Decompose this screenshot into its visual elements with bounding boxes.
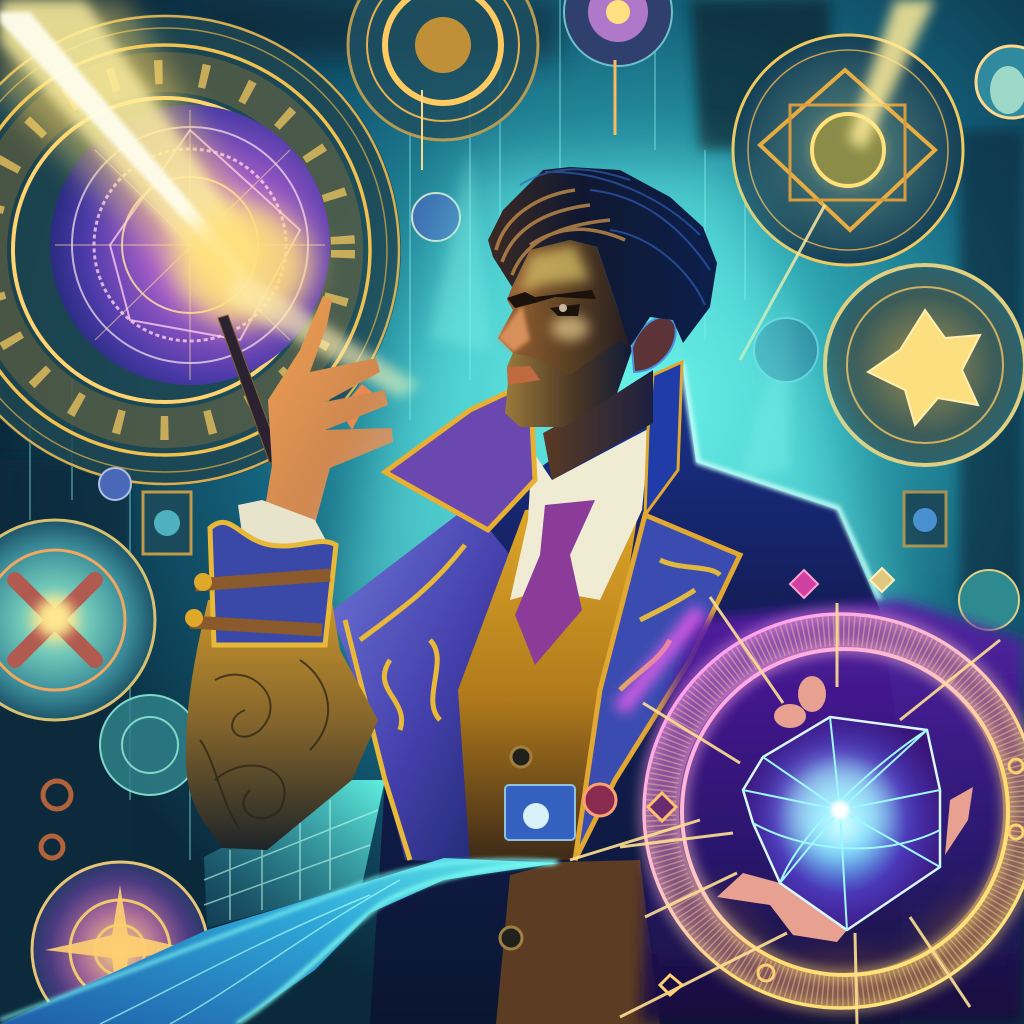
shirt: white collar and front — [510, 428, 650, 600]
coat: gold embroidery — [345, 545, 465, 860]
coat cuff — [210, 522, 336, 645]
figure: sorcerer — [186, 167, 905, 1024]
hair: blue strands — [520, 169, 710, 305]
light beam to the wand tip — [0, 0, 420, 398]
cuff straps — [190, 575, 330, 630]
warm glow in lower interior — [700, 880, 990, 972]
arcane orb: top right edge — [976, 46, 1024, 118]
arcane circle: bottom left star — [32, 862, 208, 1024]
ear — [632, 317, 676, 372]
brooch — [523, 803, 549, 829]
vest button — [511, 747, 531, 767]
magic circle: lower right pink and gold — [570, 568, 1024, 1024]
coat: dark blue body — [370, 362, 905, 1024]
collar: right blue — [645, 362, 682, 515]
small blue circles — [99, 193, 1019, 630]
mouth — [507, 366, 540, 385]
sleeve: swirl lines — [200, 660, 328, 830]
arcane circle: large purple circle upper left — [0, 14, 401, 486]
neck — [543, 370, 653, 480]
rays — [570, 597, 1000, 1024]
aura behind the figure — [330, 170, 900, 640]
eye white — [559, 304, 567, 312]
coat: purple patterned front — [330, 505, 510, 862]
collar: left purple — [385, 382, 535, 530]
face — [498, 240, 632, 427]
forehead highlight — [518, 245, 590, 295]
vest: gold waistcoat — [458, 500, 640, 860]
beard — [505, 340, 632, 427]
sigil: left diamond — [648, 793, 676, 821]
magic glow along lapel — [620, 610, 700, 710]
lapel: gold embroidery — [620, 560, 720, 690]
dark purple field behind magic circle — [640, 600, 1024, 1024]
hair: gold strands — [496, 190, 625, 275]
palm and fingers — [260, 296, 393, 538]
cheek highlight — [551, 315, 589, 341]
coat: cyan rim light — [682, 362, 880, 600]
arcane circle: right star — [825, 265, 1024, 465]
arcane circle: lower left teal — [100, 695, 200, 795]
pendant under purple circle — [614, 60, 616, 135]
lapel: right blue and gold — [575, 515, 740, 860]
shirt cuff — [238, 500, 330, 555]
arcane circle: top centre purple — [564, 0, 672, 66]
glowing crystal orb — [743, 717, 940, 930]
gold ornaments at the left edge — [41, 781, 71, 858]
hair — [488, 167, 717, 347]
cuff buckles — [185, 573, 212, 627]
sleeve: gold brocade — [186, 590, 378, 850]
glass grid panel behind cape — [204, 780, 385, 928]
hand holding the orb — [717, 676, 973, 942]
pocket device — [505, 785, 575, 840]
sigil: gold diamond — [870, 568, 894, 592]
brown coat tail — [496, 860, 660, 1024]
coat button — [500, 927, 522, 949]
sigil: pink diamond — [790, 570, 818, 598]
back finger — [340, 384, 372, 430]
wand — [218, 315, 280, 464]
nose highlight — [498, 305, 530, 352]
sigil: gold rings right — [660, 759, 1023, 995]
cyan flowing cape — [0, 858, 559, 1024]
brow and eye — [507, 290, 596, 316]
tie: purple — [515, 500, 595, 665]
arcane circle: upper right gold geometry — [733, 0, 963, 360]
raised hand holding wand — [185, 296, 393, 645]
arcane circle: top centre gold — [348, 0, 538, 170]
arcane circle: left mid — [0, 520, 155, 720]
sigil: round red — [584, 784, 616, 816]
framed talismans — [143, 492, 946, 554]
